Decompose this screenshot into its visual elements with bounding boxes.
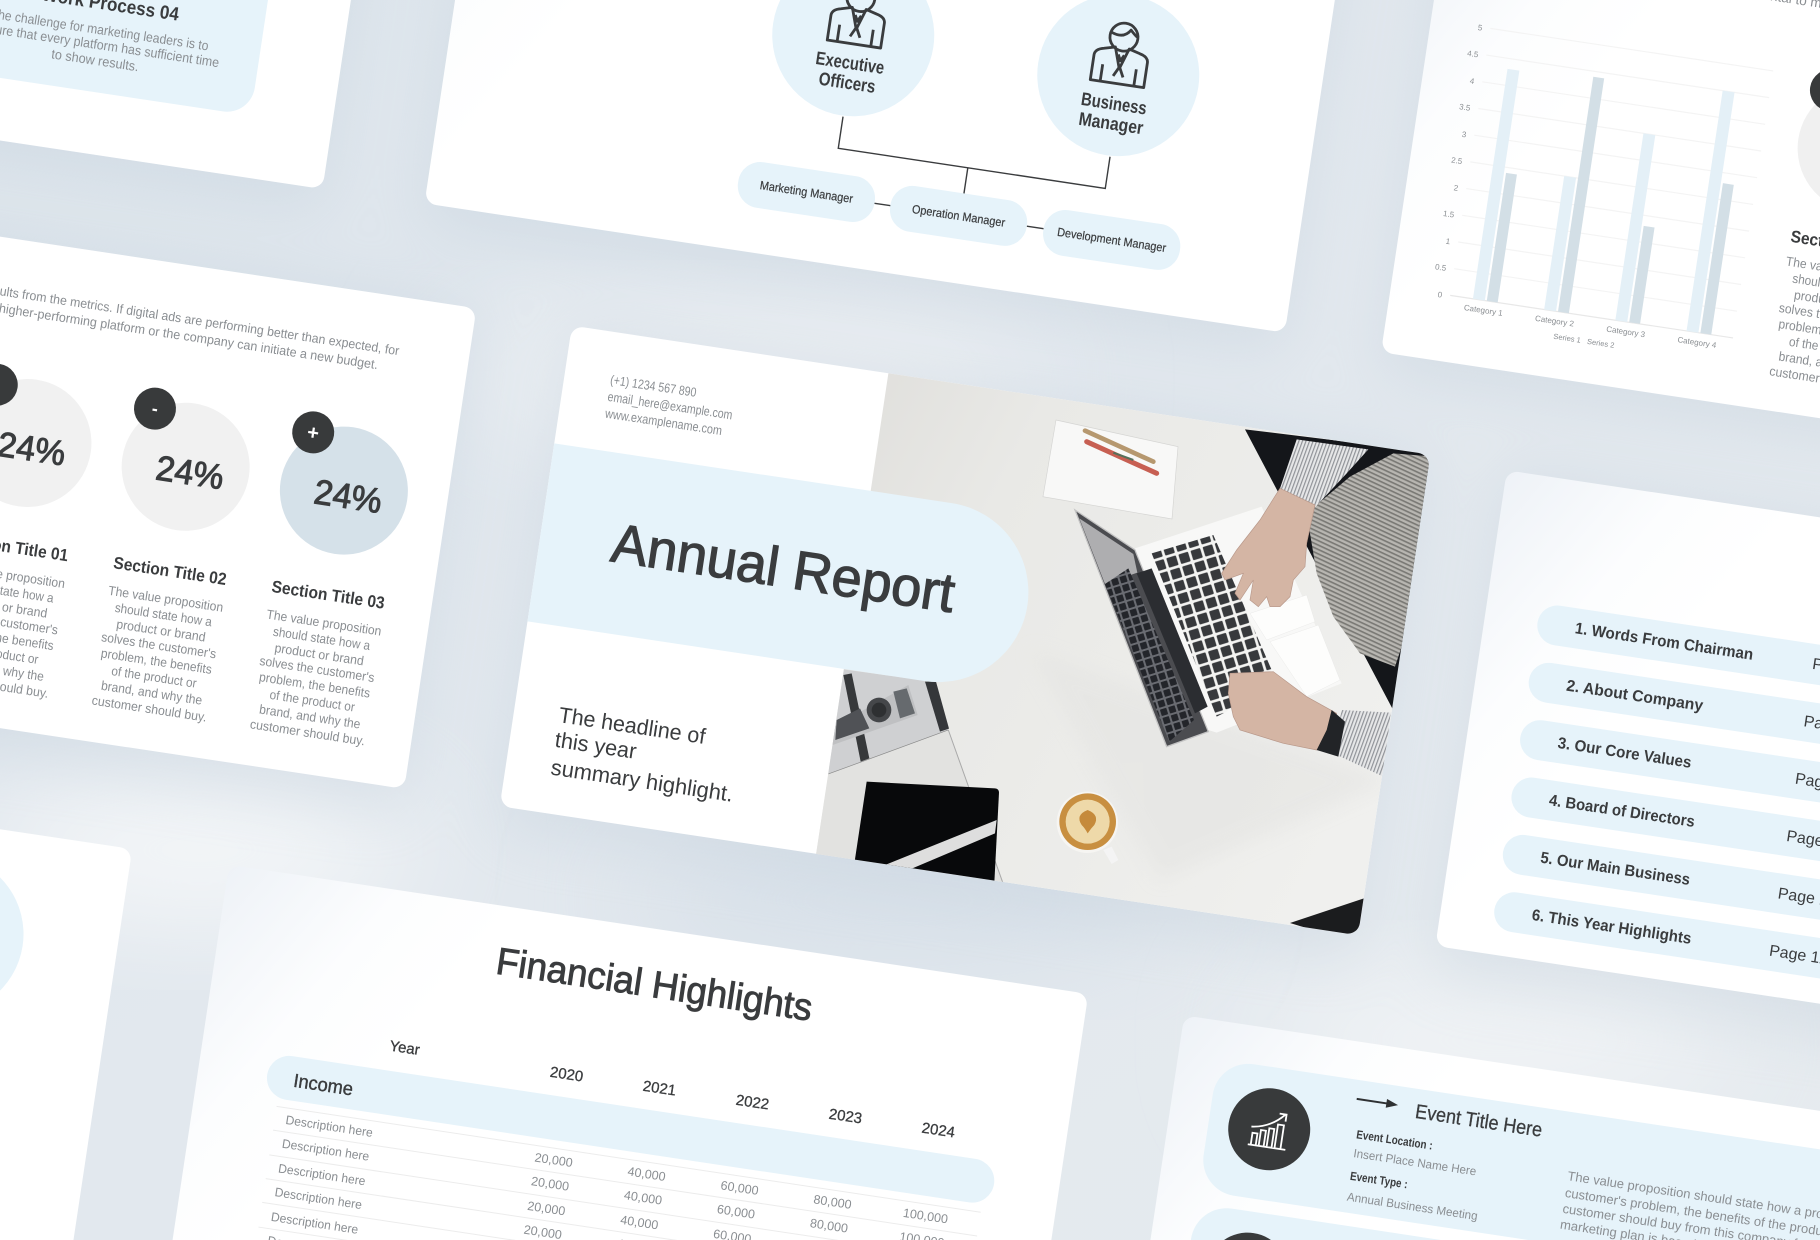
chart legend: Series 2 <box>1586 337 1615 350</box>
panel: work process slide <box>0 0 395 189</box>
circle: business manager <box>1026 0 1210 167</box>
table rows <box>266 1113 949 1240</box>
panel: annual report photo <box>816 373 1429 934</box>
section 03 text <box>249 577 387 748</box>
table rows: 20,000 <box>526 1199 566 1218</box>
photo: notepad and pens <box>1043 420 1178 519</box>
panel: annual report overlay <box>505 365 1053 846</box>
section 03 text: product or brand <box>274 640 365 668</box>
event details: Insert Place Name Here <box>1353 1146 1478 1178</box>
contents row 4 <box>1509 775 1820 927</box>
event details <box>1346 1127 1488 1223</box>
photo: person and chair <box>1245 429 1440 777</box>
photo: laptop base <box>1135 507 1342 733</box>
contact details: (+1) 1234 567 890 <box>609 372 698 400</box>
photo: laptop screen <box>1075 510 1208 747</box>
photo: watch <box>1317 710 1345 757</box>
icon: executive <box>827 0 890 48</box>
arrow <box>1356 1096 1396 1108</box>
table rows: 60,000 <box>716 1202 756 1222</box>
photo: tray <box>815 669 1004 886</box>
stat circle 02 <box>113 384 260 540</box>
event title: Event Title Here <box>1414 1101 1544 1142</box>
circle: executive officers: Executive <box>814 47 886 78</box>
photo: remote <box>833 685 918 745</box>
photo: upper right objects <box>1043 420 1440 777</box>
contents row 1: 1. Words From Chairman <box>1574 620 1754 664</box>
contents row 4: 4. Board of Directors <box>1548 792 1696 831</box>
table header <box>388 1038 956 1141</box>
org connector lines <box>831 117 1110 237</box>
y axis labels: 3 <box>1461 130 1467 140</box>
income label: Income <box>292 1071 354 1100</box>
chart legend: Series 1 <box>1553 332 1581 345</box>
table rows: Description here <box>285 1113 374 1140</box>
table header: 2020 <box>549 1064 584 1086</box>
section 02 text: problem, the benefits <box>100 645 213 677</box>
event details: Event Location : <box>1355 1127 1434 1153</box>
series 1 bars <box>1473 59 1735 333</box>
section 01 text <box>0 529 71 701</box>
work process text <box>0 4 222 86</box>
section 03 text: The value proposition <box>266 607 383 639</box>
series 2 bars <box>1487 66 1747 335</box>
chip: marketing manager: Marketing Manager <box>759 178 854 206</box>
chip: development manager <box>1040 207 1183 273</box>
table rows: 100,000 <box>902 1206 949 1226</box>
panel: lower left slide <box>0 720 132 1240</box>
table title: Financial Highlights <box>493 941 815 1030</box>
table rows: 40,000 <box>623 1188 663 1208</box>
photo: lower left objects <box>815 669 1118 886</box>
table rows: 80,000 <box>813 1192 853 1212</box>
stat circle 03 <box>271 408 418 563</box>
category labels: Category 3 <box>1606 325 1646 339</box>
contact details: email_here@example.com <box>607 389 734 422</box>
title: Annual Report <box>608 511 959 624</box>
stat circle 01 <box>0 360 102 516</box>
table rows: 80,000 <box>809 1216 849 1236</box>
table rows: 60,000 <box>720 1178 760 1198</box>
panel: organisation slide <box>424 0 1357 333</box>
chip: operation manager: Operation Manager <box>911 202 1006 230</box>
section text, chart slide <box>1649 0 1820 396</box>
contact details <box>603 372 736 439</box>
headline: this year <box>553 727 638 764</box>
y axis labels: 4 <box>1469 76 1475 86</box>
y axis labels: 0 <box>1437 290 1443 300</box>
icon: business manager <box>1090 19 1153 88</box>
section 02 text: solves the customer's <box>100 629 218 661</box>
y axis labels: 4.5 <box>1467 49 1479 59</box>
work process text: to show results. <box>50 46 140 74</box>
table rows: 20,000 <box>534 1150 574 1170</box>
table rows: Description here <box>270 1210 359 1237</box>
section 02 text: should state how a <box>114 600 214 629</box>
table rows: Description here <box>281 1137 370 1164</box>
section 03 text: should state how a <box>272 624 372 653</box>
title band <box>527 443 1041 694</box>
stat circle 02: - <box>151 398 159 419</box>
contents row 6 <box>1491 890 1820 1042</box>
table header: 2021 <box>642 1078 677 1100</box>
table rows: Description here <box>277 1161 366 1188</box>
circle: lower left <box>0 843 35 1025</box>
photo: coffee cup <box>1057 792 1118 864</box>
chart legend <box>1553 332 1615 350</box>
contents row 2: 2. About Company <box>1565 678 1704 715</box>
table header: Year <box>388 1038 421 1059</box>
panel: event slide <box>1112 1015 1820 1240</box>
panel: percentage sections slide <box>0 179 476 789</box>
y axis labels: 2 <box>1453 183 1459 193</box>
stat circle 03: 24% <box>311 472 385 521</box>
section 02 text: brand, and why the <box>100 678 203 708</box>
contents row 5: 5. Our Main Business <box>1539 850 1691 889</box>
circle: business manager: Manager <box>1077 108 1145 138</box>
headline: The headline of <box>557 702 708 749</box>
y axis labels: 2.5 <box>1451 156 1463 166</box>
table header: 2022 <box>735 1092 770 1114</box>
photo: tablet <box>855 782 999 883</box>
contact details: www.examplename.com <box>603 406 723 438</box>
category labels: Category 2 <box>1535 314 1575 329</box>
section 03 text: Section Title 03 <box>270 577 386 613</box>
circle: business manager: Business <box>1080 88 1148 119</box>
photo desk surface <box>822 373 1392 926</box>
table rows: 40,000 <box>619 1213 659 1232</box>
contents row 1 <box>1535 603 1820 755</box>
bar chart <box>1427 22 1774 367</box>
headline: summary highlight. <box>549 755 735 807</box>
contents row 2 <box>1526 660 1820 813</box>
panel: main slide base <box>500 326 1430 935</box>
y axis labels: 5 <box>1477 23 1483 33</box>
section 02 text: product or brand <box>115 616 207 645</box>
panel: financial highlights slide <box>157 865 1088 1240</box>
section 03 text: problem, the benefits <box>258 669 372 701</box>
table rows: 20,000 <box>530 1174 570 1194</box>
income band <box>264 1053 997 1206</box>
section 02 text: Section Title 02 <box>112 553 228 589</box>
y axis labels: 1 <box>1445 237 1451 246</box>
photo: hands <box>1222 488 1337 750</box>
section 02 text <box>91 553 229 725</box>
section 02 text: The value proposition <box>107 583 224 615</box>
headline <box>549 702 743 807</box>
contents row 6: 6. This Year Highlights <box>1531 907 1692 948</box>
icon: growth chart <box>1223 1083 1316 1176</box>
contents row 5 <box>1500 832 1820 985</box>
contents row 3 <box>1517 717 1820 870</box>
y axis labels <box>1430 22 1483 300</box>
event details: Event Type : <box>1349 1169 1409 1191</box>
y axis labels: 0.5 <box>1434 262 1447 273</box>
table rules <box>258 1106 981 1240</box>
table header: 2023 <box>828 1106 863 1127</box>
panel: table of contents slide <box>1435 470 1820 1075</box>
stat circle 03: + <box>306 422 320 445</box>
section 03 text: brand, and why the <box>258 702 361 732</box>
stat circle 02: 24% <box>153 449 226 497</box>
table rows: Description here <box>274 1185 363 1212</box>
circle: executive officers <box>761 0 945 127</box>
circle: executive officers: Officers <box>817 68 877 97</box>
event card 1 <box>1198 1059 1820 1240</box>
chip: operation manager <box>887 183 1030 249</box>
panel: chart slide <box>1381 0 1820 481</box>
work process pill <box>0 0 284 116</box>
chip: development manager: Development Manager <box>1056 225 1167 255</box>
section 02 text: customer should buy. <box>91 693 208 725</box>
event details: Annual Business Meeting <box>1346 1190 1479 1223</box>
category labels <box>1463 303 1717 350</box>
y axis labels: 3.5 <box>1459 102 1471 113</box>
table header: 2024 <box>921 1120 956 1141</box>
section 03 text: solves the customer's <box>259 653 376 685</box>
table rows: 40,000 <box>627 1164 667 1184</box>
section 03 text: of the product or <box>269 687 357 715</box>
category labels: Category 1 <box>1463 303 1504 318</box>
y axis labels: 1.5 <box>1443 209 1455 220</box>
contents row 3: 3. Our Core Values <box>1557 735 1693 772</box>
event card 2 <box>1177 1203 1820 1240</box>
chip: marketing manager <box>735 159 878 225</box>
photo: bottom corner <box>1290 898 1364 934</box>
section 02 text: of the product or <box>110 663 198 691</box>
category labels: Category 4 <box>1677 335 1717 350</box>
section 03 text: customer should buy. <box>249 716 366 748</box>
